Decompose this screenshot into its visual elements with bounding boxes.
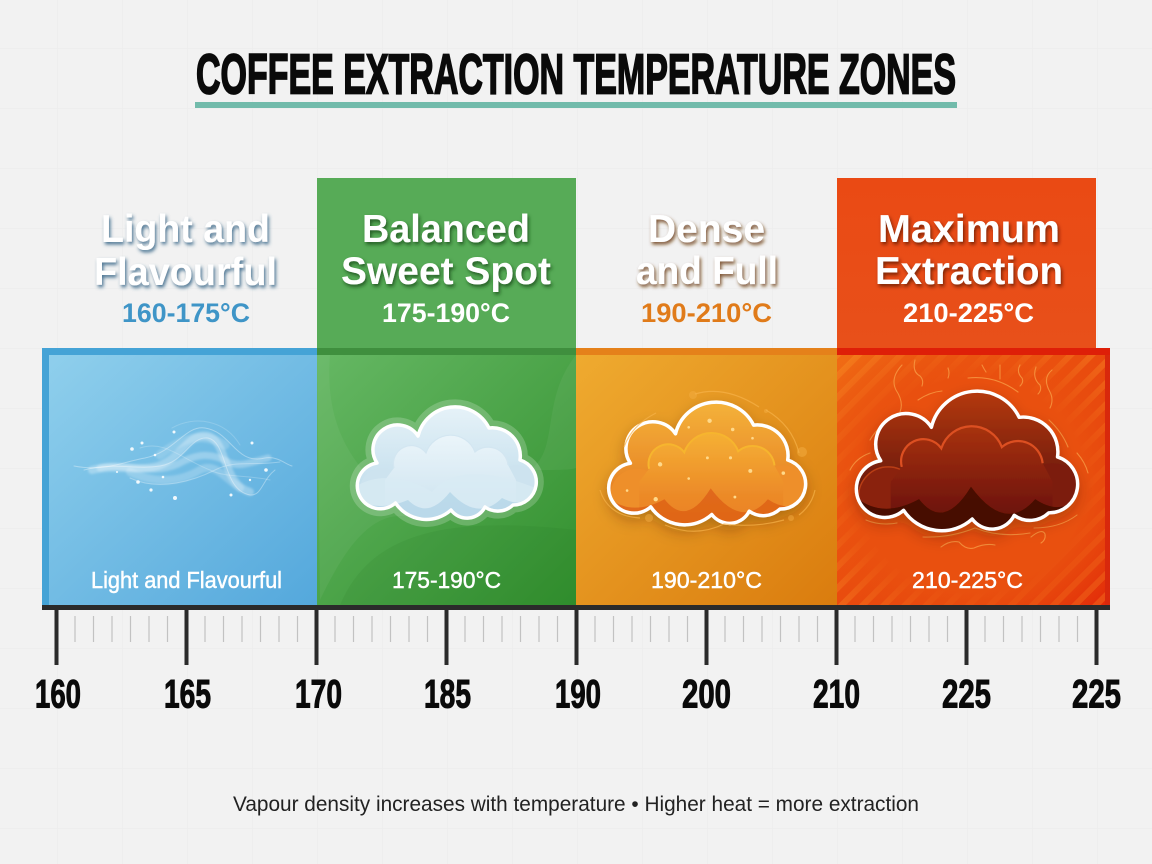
heading: maximum extraction: Extraction bbox=[875, 250, 1063, 293]
major ticks bbox=[56, 610, 1096, 665]
heading: maximum extraction bbox=[875, 208, 1063, 293]
panel: balanced zone header block bbox=[317, 178, 576, 350]
axis numbers: 200 bbox=[682, 672, 731, 716]
icon: vapour specks bbox=[116, 430, 268, 500]
icon: light vapour wisps bbox=[74, 421, 292, 495]
axis numbers: 210 bbox=[813, 672, 860, 716]
panel: light zone band bbox=[42, 348, 317, 605]
axis numbers: 165 bbox=[164, 672, 211, 716]
heading: light and flavourful: Light and bbox=[101, 208, 270, 251]
axis numbers: 225 bbox=[1072, 672, 1121, 716]
heading: maximum extraction: Maximum bbox=[878, 208, 1060, 251]
axis numbers: 225 bbox=[942, 672, 991, 716]
label: 190-210: 190-210°C bbox=[651, 567, 762, 593]
heading: dense and full: and Full bbox=[636, 250, 778, 293]
heading: light and flavourful bbox=[94, 208, 277, 294]
speckles bbox=[626, 419, 785, 501]
range: 190-210: 190-210°C bbox=[641, 298, 772, 328]
heading: dense and full bbox=[636, 208, 778, 293]
decorative leaf shapes bbox=[317, 355, 576, 605]
label: 210-225: 210-225°C bbox=[912, 567, 1023, 593]
heading: balanced sweet spot: Balanced bbox=[362, 208, 530, 251]
panel: maximum zone band bbox=[837, 348, 1110, 605]
range: 175-190: 175-190°C bbox=[382, 298, 510, 328]
panel: maximum zone header block bbox=[837, 178, 1096, 350]
icon: orange heat ripples bbox=[600, 391, 815, 531]
range: 210-225: 210-225°C bbox=[903, 298, 1034, 328]
heading: balanced sweet spot bbox=[341, 208, 551, 293]
heading: light and flavourful: Flavourful bbox=[94, 251, 277, 294]
footer note: Vapour density increases with temperature • Higher heat = more extraction bbox=[233, 793, 919, 816]
icon: orange cloud bbox=[603, 402, 815, 536]
axis numbers: 185 bbox=[424, 672, 471, 716]
range: 160-175: 160-175°C bbox=[122, 298, 250, 328]
icon: heat squiggles bbox=[850, 360, 1088, 548]
axis numbers bbox=[35, 672, 1121, 716]
axis numbers: 160 bbox=[35, 672, 81, 716]
panel: dense zone band bbox=[576, 348, 837, 605]
axis numbers: 170 bbox=[295, 672, 342, 716]
panel: balanced zone band bbox=[317, 348, 576, 605]
label: 175-190: 175-190°C bbox=[392, 567, 501, 593]
icon: white cloud bbox=[350, 407, 545, 530]
heading: dense and full: Dense bbox=[648, 208, 765, 251]
icon: dark red cloud bbox=[850, 391, 1088, 544]
label: light and flavourful: Light and Flavourful bbox=[91, 567, 282, 593]
minor ticks bbox=[75, 616, 1078, 642]
temperature axis bbox=[35, 605, 1121, 716]
heading: balanced sweet spot: Sweet Spot bbox=[341, 250, 551, 293]
axis numbers: 190 bbox=[555, 672, 601, 716]
